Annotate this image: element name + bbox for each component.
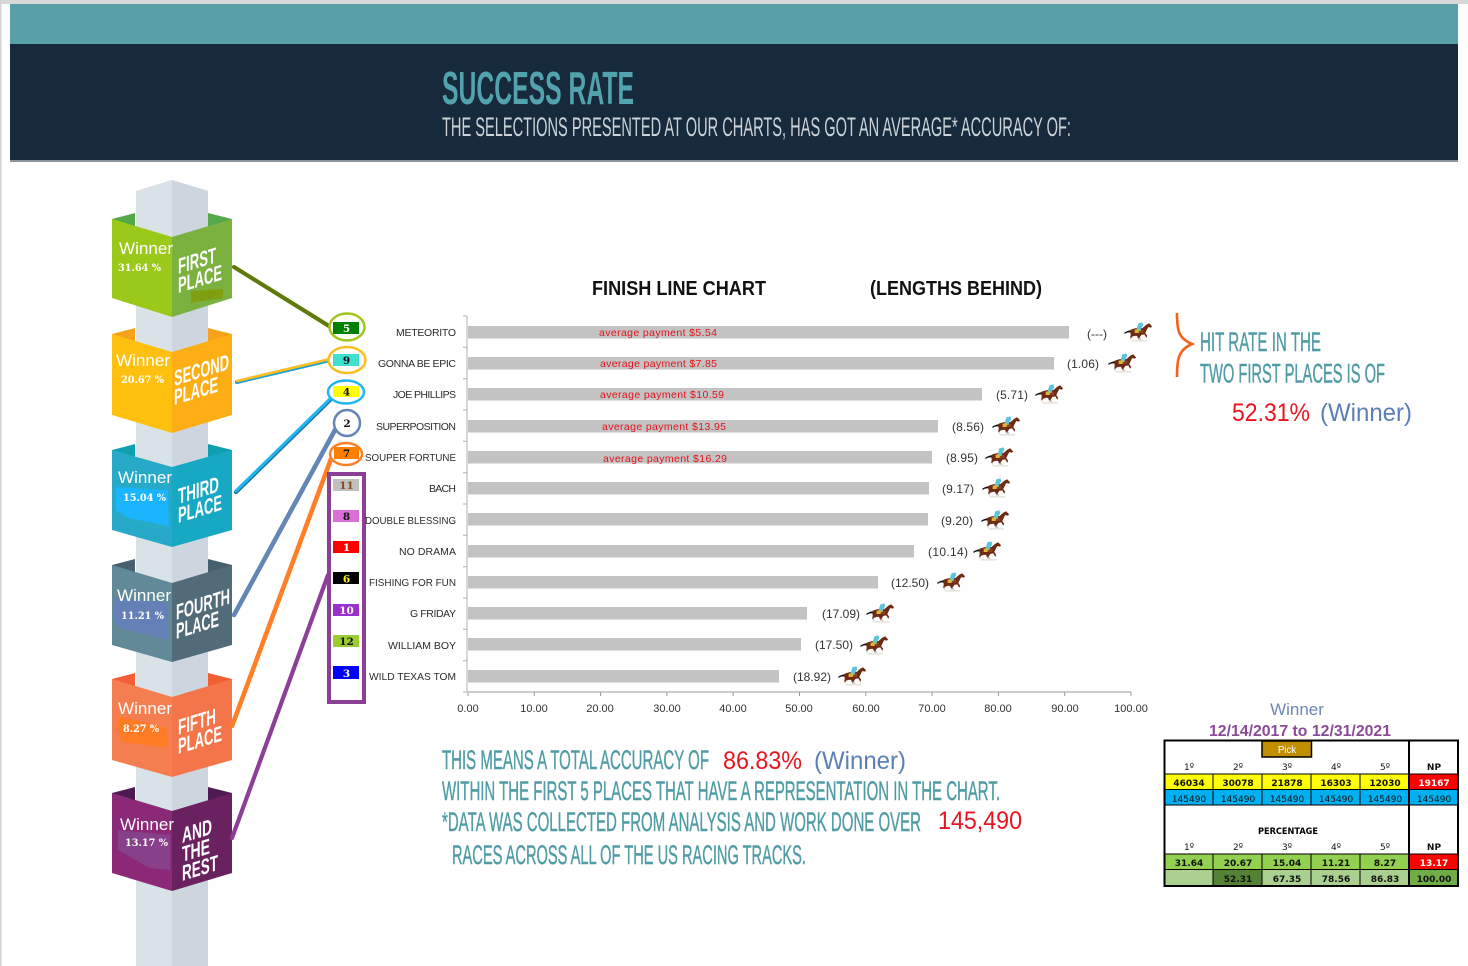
column headers (1184, 763, 1441, 773)
percentage headers: 2º (1233, 843, 1243, 853)
table heading: 12/14/2017 to 12/31/2021 (1209, 723, 1391, 740)
badge 12: 12 (339, 636, 354, 648)
label: winner fourth: Winner (117, 587, 172, 605)
badge 5 (330, 314, 364, 340)
block: fourth place (112, 559, 232, 662)
label: third place (178, 471, 222, 528)
percentage headers: 4º (1331, 843, 1341, 853)
badge 3 (333, 666, 359, 680)
label: first percent: 31.64 % (118, 263, 161, 274)
block: third place (112, 444, 232, 547)
lengths behind values: (9.17) (942, 482, 974, 496)
badge 6: 6 (343, 574, 350, 586)
chart subtitle: (LENGTHS BEHIND) (870, 278, 1042, 300)
accuracy text block (442, 745, 1022, 870)
hit rate value (1232, 399, 1412, 427)
percentage headers: 5º (1380, 843, 1390, 853)
axes: 30.00 (653, 703, 681, 715)
table heading (1209, 700, 1391, 740)
percentage headers (1184, 843, 1441, 853)
hit rate text (1200, 327, 1385, 388)
badge 7: 7 (343, 448, 350, 460)
column headers: NP (1427, 763, 1441, 773)
label: fourth place: FOURTH (176, 584, 230, 625)
label: and the rest: AND (182, 814, 212, 848)
badge 2: 2 (343, 418, 351, 430)
counts values: 30078 (1222, 779, 1254, 789)
horse names: G FRIDAY (410, 608, 456, 620)
lengths behind values: (1.06) (1067, 357, 1099, 371)
column headers: 5º (1380, 763, 1390, 773)
lengths behind values: (18.92) (793, 670, 831, 684)
label: winner first: Winner (119, 240, 174, 258)
label: first place: PLACE (178, 260, 222, 298)
results table (1164, 740, 1458, 886)
column headers: 4º (1331, 763, 1341, 773)
percentage values: 13.17 (1420, 859, 1448, 869)
horse names: JOE PHILLIPS (393, 389, 456, 401)
label: fourth place: PLACE (176, 606, 219, 644)
average payments: average payment $10.59 (600, 389, 724, 401)
percentage values: 11.21 (1322, 859, 1350, 869)
horse names: NO DRAMA (399, 546, 456, 558)
hit rate text: HIT RATE IN THE (1200, 327, 1321, 357)
label: winner second: Winner (116, 352, 171, 370)
average payments: average payment $16.29 (603, 453, 727, 465)
axes: 100.00 (1114, 703, 1148, 715)
lengths behind values: (17.50) (815, 638, 853, 652)
label: fifth percent: 8.27 % (123, 724, 159, 735)
hit rate value: 52.31% (1232, 399, 1310, 427)
accuracy text block: 145,490 (938, 807, 1022, 835)
block: second place (112, 328, 232, 433)
label: winner fifth: Winner (118, 700, 173, 718)
totals values: 145490 (1368, 795, 1402, 805)
box: other selections (329, 474, 364, 702)
horse names (365, 327, 456, 683)
lengths behind values: (8.95) (946, 451, 978, 465)
label: fifth place (178, 702, 222, 759)
orange brace (1177, 313, 1192, 377)
percentage values: 20.67 (1224, 859, 1252, 869)
lengths behind values (793, 327, 1107, 684)
horse names: DOUBLE BLESSING (365, 515, 456, 527)
totals values: 145490 (1417, 795, 1451, 805)
average payments: average payment $7.85 (600, 358, 717, 370)
hit rate value: (Winner) (1320, 399, 1412, 427)
badge 1 (333, 541, 359, 554)
counts values (1173, 779, 1450, 789)
horse names: FISHING FOR FUN (369, 577, 456, 589)
totals values: 145490 (1221, 795, 1255, 805)
axes: 40.00 (719, 703, 747, 715)
average payments: average payment $13.95 (602, 421, 726, 433)
column behind the blocks (136, 180, 208, 966)
label: and the rest: REST (182, 850, 218, 886)
badge 8: 8 (343, 511, 350, 523)
badge 3: 3 (343, 668, 350, 680)
horse icons (838, 322, 1152, 685)
totals values: 145490 (1319, 795, 1353, 805)
axes: 90.00 (1051, 703, 1079, 715)
pick header: Pick (1278, 745, 1296, 756)
average payments: average payment $5.54 (599, 327, 717, 339)
percentage values: 15.04 (1273, 859, 1301, 869)
connector lines from blocks to badges (232, 267, 335, 838)
badge 7 (330, 443, 362, 465)
label: third percent: 15.04 % (123, 493, 166, 504)
table heading: Winner (1270, 700, 1324, 719)
axes (457, 316, 1148, 715)
cumulative values: 86.83 (1371, 875, 1399, 885)
lengths behind values: (---) (1087, 327, 1107, 341)
label: second percent: 20.67 % (121, 375, 164, 386)
column headers: 1º (1184, 763, 1194, 773)
badge 10 (333, 604, 359, 617)
badge 8 (333, 510, 359, 523)
cumulative values: 100.00 (1417, 875, 1451, 885)
label: winner rest: Winner (120, 816, 175, 834)
badge 9 (328, 347, 366, 373)
horse names: SUPERPOSITION (376, 421, 456, 433)
accuracy text block: (Winner) (814, 747, 906, 775)
cumulative values: 67.35 (1273, 875, 1301, 885)
label: fourth place (176, 584, 230, 644)
axes: 0.00 (457, 703, 479, 715)
badge 2 (334, 410, 360, 436)
lengths behind values: (8.56) (952, 420, 984, 434)
percentage values (1175, 859, 1448, 869)
percentage values: 8.27 (1374, 859, 1396, 869)
label: second place: PLACE (174, 372, 218, 410)
label: second place: SECOND (174, 350, 229, 391)
label: first place: FIRST (178, 243, 216, 279)
label: second place (174, 350, 229, 410)
percentage headers: NP (1427, 843, 1441, 853)
counts values: 19167 (1418, 779, 1450, 789)
badge 5: 5 (343, 323, 350, 335)
badge 10: 10 (339, 605, 354, 617)
badge 11 (333, 479, 359, 492)
label: third place: THIRD (178, 472, 219, 509)
accuracy text block: RACES ACROSS ALL OF THE US RACING TRACKS. (452, 840, 806, 870)
lengths behind values: (10.14) (928, 545, 968, 559)
bars (468, 326, 1069, 682)
column headers: 3º (1282, 763, 1292, 773)
percentage headers: 3º (1282, 843, 1292, 853)
lengths behind values: (12.50) (891, 576, 929, 590)
accuracy text block: WITHIN THE FIRST 5 PLACES THAT HAVE A REPRESENTATION IN THE CHART. (442, 776, 1000, 806)
axes: 80.00 (984, 703, 1012, 715)
block: first place (112, 180, 232, 317)
label: fifth place: FIFTH (178, 704, 216, 740)
badge 1: 1 (343, 542, 350, 554)
counts values: 46034 (1173, 779, 1205, 789)
cumulative values: 78.56 (1322, 875, 1350, 885)
block: and the rest (112, 787, 232, 891)
totals values (1172, 795, 1451, 805)
row: percentages (1164, 854, 1458, 886)
horse names: SOUPER FORTUNE (365, 452, 456, 464)
lengths behind values: (5.71) (996, 388, 1028, 402)
title: success rate: SUCCESS RATE (442, 62, 634, 114)
horse names: BACH (429, 483, 456, 495)
counts values: 21878 (1271, 779, 1303, 789)
badge group: selections (328, 314, 366, 702)
label: and the rest: THE (182, 834, 210, 867)
axes: 10.00 (520, 703, 548, 715)
counts values: 12030 (1369, 779, 1401, 789)
column headers: 2º (1233, 763, 1243, 773)
label: winner third: Winner (118, 469, 173, 487)
axes: 60.00 (852, 703, 880, 715)
badge 9: 9 (343, 355, 350, 367)
label: third place: PLACE (178, 490, 222, 528)
badge 4: 4 (343, 386, 350, 398)
pick header (1262, 741, 1312, 757)
axes: 70.00 (918, 703, 946, 715)
label: and the rest (182, 812, 218, 886)
counts values: 16303 (1320, 779, 1352, 789)
label: fourth percent: 11.21 % (121, 611, 164, 622)
row: counts (1164, 774, 1458, 805)
badge 4 (328, 380, 364, 404)
percentage label: PERCENTAGE (1258, 827, 1318, 837)
accuracy text block: THIS MEANS A TOTAL ACCURACY OF (442, 745, 709, 775)
accuracy text block: 86.83% (723, 747, 802, 775)
badge 6 (333, 572, 359, 586)
badge 12 (333, 635, 359, 648)
axes: 20.00 (586, 703, 614, 715)
chart title: FINISH LINE CHART (592, 278, 766, 300)
block: fifth place (112, 673, 232, 777)
header banner (10, 4, 1458, 162)
horse names: METEORITO (396, 327, 456, 339)
label: fifth place: PLACE (178, 721, 222, 759)
axes: 50.00 (785, 703, 813, 715)
horse names: WILLIAM BOY (388, 640, 456, 652)
lengths behind values: (17.09) (822, 607, 860, 621)
cumulative values: 52.31 (1224, 875, 1252, 885)
average payments (599, 327, 727, 465)
percentage values: 31.64 (1175, 859, 1203, 869)
label: rest percent: 13.17 % (125, 838, 168, 849)
totals values: 145490 (1172, 795, 1206, 805)
label: first place (178, 241, 222, 298)
cumulative values (1224, 875, 1451, 885)
badge 11: 11 (339, 480, 354, 492)
horse names: WILD TEXAS TOM (369, 671, 456, 683)
horse names: GONNA BE EPIC (378, 358, 456, 370)
lengths behind values: (9.20) (941, 514, 973, 528)
totals values: 145490 (1270, 795, 1304, 805)
accuracy text block: *DATA WAS COLLECTED FROM ANALYSIS AND WORK DONE OVER (442, 807, 921, 837)
percentage headers: 1º (1184, 843, 1194, 853)
bar chart: finish line (365, 316, 1152, 715)
